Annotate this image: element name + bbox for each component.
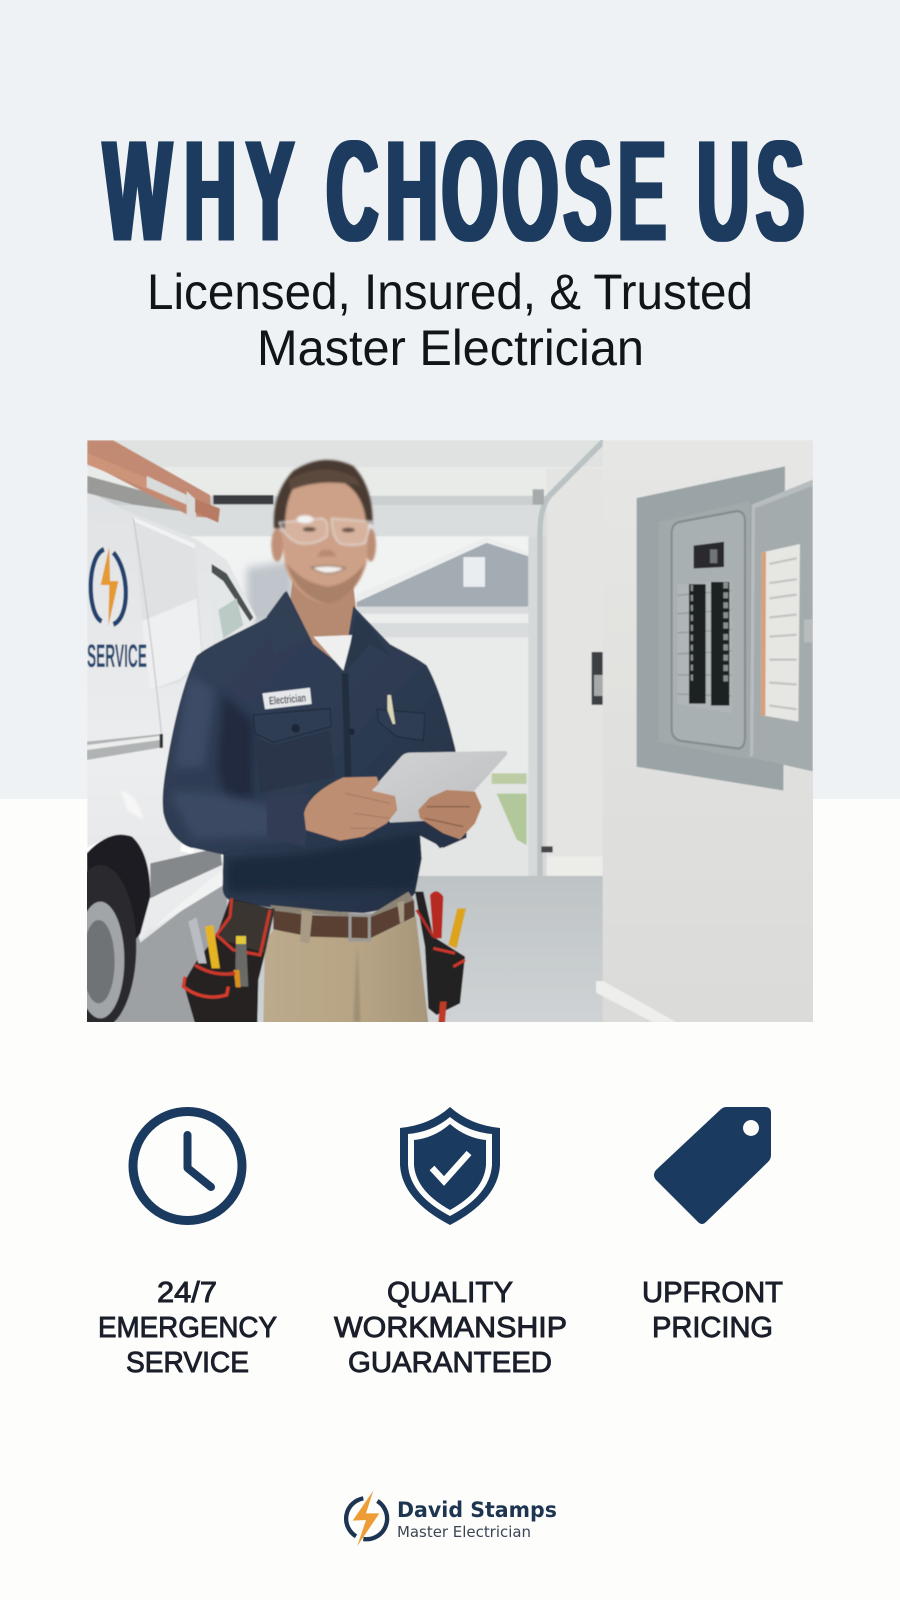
undershirt <box>313 635 353 671</box>
garage ceiling and header <box>87 440 604 536</box>
head <box>271 460 376 604</box>
door track and side wall <box>528 441 604 879</box>
background lower panel <box>0 799 900 1600</box>
subtitle <box>147 264 753 376</box>
van logo <box>91 547 126 626</box>
ladder on van roof <box>87 440 220 524</box>
title: WHY CHOOSE US <box>104 111 804 272</box>
icon: price tag <box>654 1107 771 1224</box>
collar <box>266 592 362 647</box>
label: GUARANTEED <box>348 1347 552 1379</box>
label <box>334 1277 567 1379</box>
pen <box>387 695 395 724</box>
label: EMERGENCY <box>98 1312 277 1344</box>
photo: electrician in garage <box>64 440 816 1028</box>
brand name: David Stamps <box>397 1498 557 1522</box>
shirt details, hands and tablet <box>253 592 507 848</box>
far cuff <box>436 833 468 849</box>
label: SERVICE <box>126 1347 249 1379</box>
label: 24/7 <box>157 1277 217 1309</box>
photo: electrician in garage: SERVICE <box>87 638 147 674</box>
label <box>642 1277 783 1344</box>
right hand <box>418 790 482 839</box>
label: WORKMANSHIP <box>334 1312 567 1344</box>
label: UPFRONT <box>642 1277 783 1309</box>
badge lettering: Electrician <box>269 692 307 708</box>
van door handle, sill and wheel <box>64 734 224 1028</box>
left hand <box>304 777 397 841</box>
pants, belt and tool pouches <box>183 891 466 1023</box>
icon: clock <box>133 1112 242 1220</box>
feature: 24/7 emergency service <box>98 1112 277 1379</box>
electrical panel <box>637 466 813 791</box>
neck <box>290 580 356 660</box>
brand tagline: Master Electrician <box>397 1523 531 1541</box>
tablet <box>372 751 507 823</box>
footer logo <box>346 1491 557 1546</box>
feature: quality workmanship guaranteed <box>334 1107 567 1379</box>
background upper panel <box>0 0 900 799</box>
subtitle: Licensed, Insured, & Trusted <box>147 264 753 320</box>
label <box>98 1277 277 1379</box>
shirt pockets <box>253 708 425 793</box>
label: QUALITY <box>387 1277 513 1309</box>
name badge <box>262 688 312 709</box>
icon: shield with check <box>400 1107 500 1225</box>
feature: upfront pricing <box>642 1107 783 1344</box>
right wall <box>596 440 816 1026</box>
cuff <box>267 808 288 834</box>
garage floor <box>226 876 604 1022</box>
label: PRICING <box>652 1312 773 1344</box>
white van <box>87 491 257 943</box>
electrician shirt <box>163 591 467 913</box>
view through garage door <box>193 536 530 877</box>
subtitle: Master Electrician <box>257 320 644 376</box>
icon: lightning ring <box>346 1491 387 1546</box>
placket <box>342 673 352 780</box>
